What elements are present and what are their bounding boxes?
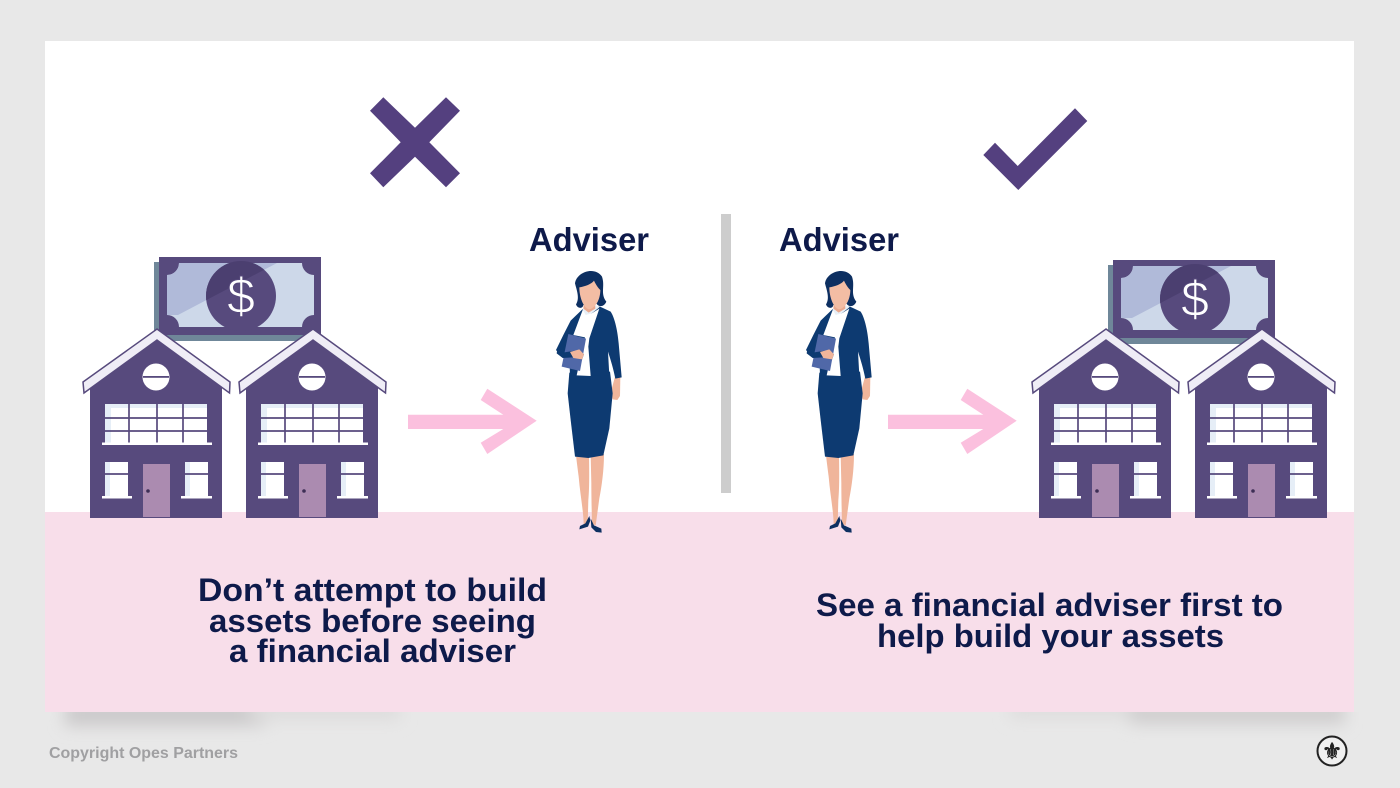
left caption: Don’t attempt to build — [198, 572, 547, 608]
right house two — [1188, 329, 1335, 518]
logo — [1318, 736, 1346, 766]
right bank note icon — [1108, 253, 1275, 344]
icon: check mark — [983, 108, 1087, 190]
icon: cross mark — [370, 97, 460, 187]
right adviser figure — [806, 271, 872, 533]
left caption: a financial adviser — [229, 633, 516, 669]
divider — [721, 214, 731, 493]
logo: ⚜ — [1322, 739, 1342, 765]
left adviser label: Adviser — [529, 221, 649, 258]
left house two — [239, 329, 386, 518]
copyright: Copyright Opes Partners — [49, 745, 238, 762]
right house one — [1032, 329, 1179, 518]
pink floor band — [45, 512, 1354, 712]
left arrow — [408, 389, 537, 454]
left caption: assets before seeing — [209, 603, 536, 639]
left house one — [83, 329, 230, 518]
right adviser label: Adviser — [779, 221, 899, 258]
panel shadows — [62, 712, 1348, 731]
right caption: help build your assets — [877, 618, 1224, 654]
right arrow — [888, 389, 1017, 454]
main panel — [45, 41, 1354, 712]
left adviser figure — [556, 271, 622, 533]
left bank note icon — [154, 250, 321, 341]
right caption: See a financial adviser first to — [816, 587, 1283, 623]
